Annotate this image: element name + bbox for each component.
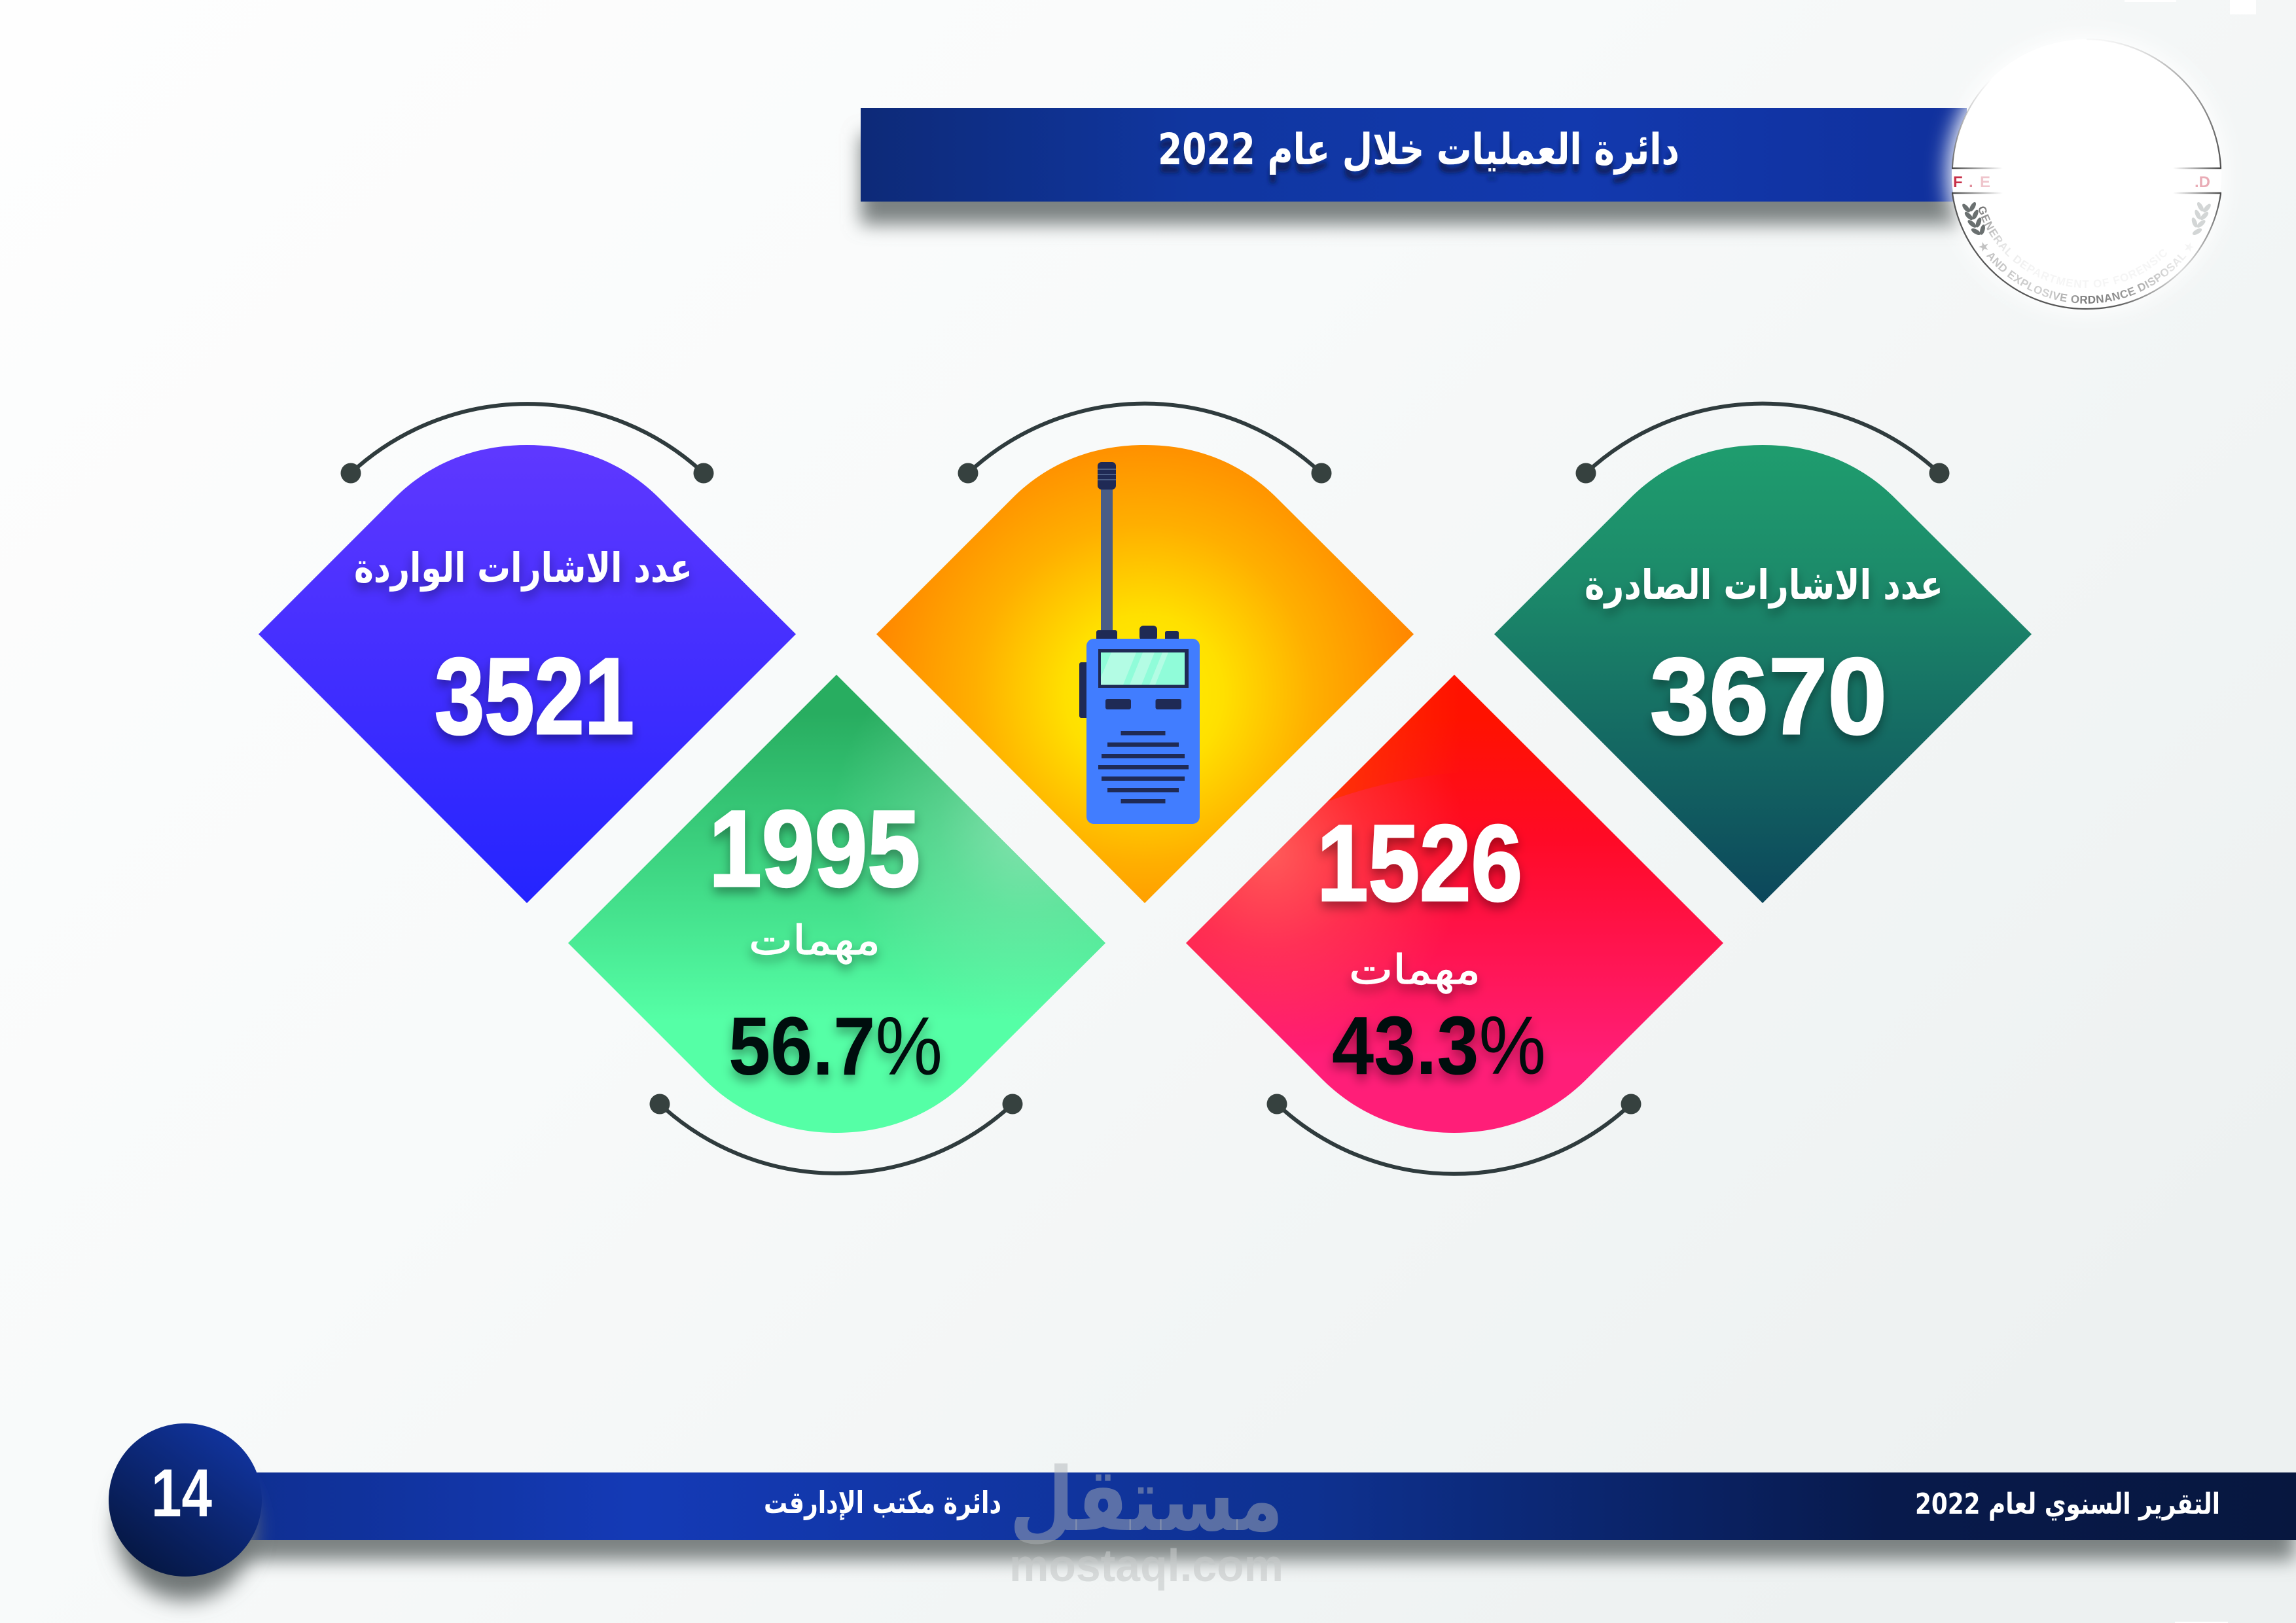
value: 1995: 1995 — [709, 789, 920, 910]
seal emblem — [1931, 39, 2221, 310]
watermark: mostaql.com — [1009, 1540, 1283, 1591]
value: 1526: 1526 — [1317, 803, 1522, 924]
page number badge — [109, 1423, 262, 1600]
footer text: annual report: التقرير السنوي لعام 2022 — [1915, 1488, 2220, 1521]
watermark: مستقل — [1009, 1449, 1283, 1551]
seal emblem: F — [1953, 173, 1963, 191]
label: tasks: مهمات — [749, 916, 880, 965]
value: 3521: 3521 — [435, 636, 634, 757]
footer bar — [223, 1472, 2296, 1560]
seal emblem: GENERAL DEPARTMENT OF FORENSIC — [1979, 207, 2166, 288]
panel: outgoing signals — [1494, 404, 2032, 903]
value: 56.7%: 56.7% — [728, 1000, 942, 1092]
icon: walkie-talkie radio — [1079, 462, 1200, 824]
page number: 14 — [151, 1455, 212, 1531]
seal emblem: ★ AND EXPLOSIVE ORDNANCE DISPOSAL ★ — [1979, 242, 2191, 304]
seal emblem: .D — [2195, 173, 2210, 191]
label: incoming signals: عدد الاشارات الواردة — [354, 544, 692, 592]
panel: incoming signals — [259, 404, 796, 903]
value: 3670: 3670 — [1650, 636, 1887, 757]
panel: red tasks — [1172, 654, 1723, 1174]
seal emblem: . — [1969, 173, 1973, 191]
panel: radio icon — [876, 404, 1414, 903]
watermark — [1009, 1449, 1283, 1591]
label: tasks: مهمات — [1349, 946, 1480, 994]
title text: دائرة العمليات خلال عام 2022 — [1158, 124, 1679, 175]
seal emblem: E — [1980, 173, 1990, 191]
title banner — [861, 108, 1967, 224]
value: 43.3%: 43.3% — [1332, 999, 1546, 1092]
label: outgoing signals: عدد الاشارات الصادرة — [1585, 561, 1943, 609]
footer text: department: دائرة مكتب الإدارقت — [764, 1485, 1001, 1520]
panel: green tasks — [568, 675, 1113, 1173]
